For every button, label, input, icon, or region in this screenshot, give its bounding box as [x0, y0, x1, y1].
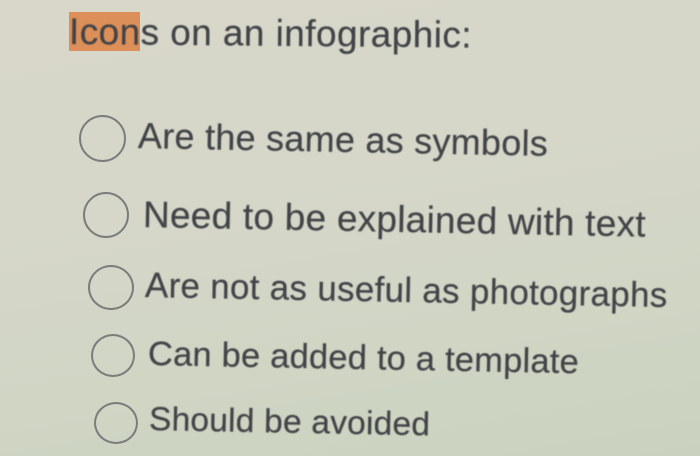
option 5 text: Should be avoided: [149, 401, 431, 443]
option 4 text: Can be added to a template: [148, 335, 579, 381]
option 3 text: Are not as useful as photographs: [145, 266, 668, 315]
option 1 radio button: [79, 115, 126, 162]
option 2 radio button: [83, 192, 129, 238]
option 4 radio button: [91, 334, 135, 377]
option 2 text: Need to be explained with text: [143, 194, 646, 245]
option 3 radio button: [88, 265, 134, 310]
question heading highlight: [69, 12, 140, 51]
option 1 text: Are the same as symbols: [138, 115, 548, 164]
question heading: Icons on an infographic:: [69, 11, 472, 56]
option 5 radio button: [94, 402, 138, 444]
